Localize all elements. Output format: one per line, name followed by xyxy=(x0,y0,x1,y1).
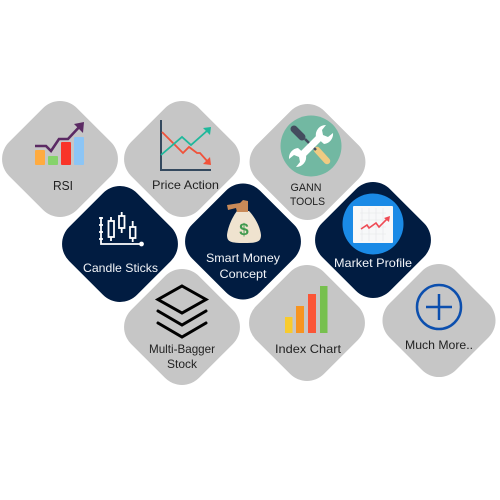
panel: Market Profile xyxy=(305,172,441,308)
label: Smart Money Concept xyxy=(206,251,280,281)
panel: Index Chart xyxy=(239,255,375,391)
label: Much More: Much More.. xyxy=(405,338,473,352)
label: Market Profile: Market Profile xyxy=(334,256,412,270)
panel: RSI xyxy=(0,91,128,227)
label: Multi-Bagger Stock: Stock xyxy=(167,357,198,371)
panel: Candle Sticks xyxy=(52,176,188,312)
label: GANN TOOLS xyxy=(290,182,325,208)
label: GANN TOOLS: GANN xyxy=(290,182,322,194)
icon: candlestick chart xyxy=(99,212,143,246)
icon: RSI bars and line xyxy=(35,122,84,165)
icon: index bars xyxy=(285,286,328,333)
label: Candle Sticks: Candle Sticks xyxy=(83,261,158,275)
panel: GANN Tools xyxy=(240,94,375,230)
panel: Multi-Bagger Stock xyxy=(114,259,250,395)
label: Multi-Bagger Stock: Multi-Bagger xyxy=(149,342,215,356)
icon: plus in circle xyxy=(417,285,461,329)
icon: market chart xyxy=(342,194,404,254)
icon: stacked layers xyxy=(158,286,206,337)
label: Multi-Bagger Stock xyxy=(149,342,215,371)
label: Index Chart: Index Chart xyxy=(275,342,342,356)
label: Smart Money Concept: Concept xyxy=(220,267,267,281)
panel: Much More xyxy=(373,254,500,387)
label: RSI: RSI xyxy=(53,179,73,193)
icon: wrench and screwdriver xyxy=(280,116,342,176)
label: Smart Money Concept: Smart Money xyxy=(206,251,280,265)
icon: price action line chart xyxy=(161,120,211,170)
label: Price Action: Price Action xyxy=(152,178,219,192)
panel: Price Action xyxy=(114,91,250,227)
icon: money bag: $ xyxy=(239,220,249,239)
label: GANN TOOLS: TOOLS xyxy=(290,196,325,208)
panel: Smart Money Concept xyxy=(175,174,311,309)
